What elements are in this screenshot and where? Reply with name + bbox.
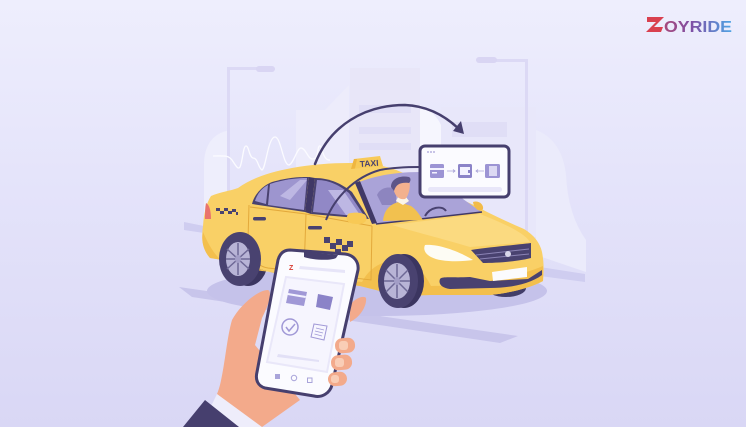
driver seat [377,187,396,205]
background city and street lamps [204,57,586,272]
rear tail light [205,203,211,219]
rear wheel rear tyre [228,234,268,286]
phone content panel [267,277,344,372]
driver [383,177,446,221]
icon: card [430,164,444,178]
rear wheel [219,232,261,286]
hand thumb side [350,297,366,322]
front bumper [439,270,542,289]
phone mini logo: Z [289,265,294,272]
tablet window dots [427,151,435,153]
icon: check circle [282,319,298,335]
tablet bottom bar [428,187,502,192]
arrowhead [453,121,464,134]
windshield base [376,212,482,224]
checker door [324,237,353,254]
hand back [217,290,300,427]
car far front wheel [486,279,526,297]
arrow: receipt to wallet [476,170,484,172]
grille [471,243,531,263]
phone notch [304,252,338,260]
arrow: card to wallet [447,170,455,172]
rear windows [252,177,309,212]
windshield [357,172,482,224]
side mirrors [347,213,367,224]
phone header bar [299,266,345,273]
taxi car [202,156,544,308]
arrow: car interior to tablet [326,167,420,220]
shirt cuff [201,394,262,427]
car body lower shade [202,232,543,296]
door handles [253,217,266,220]
phone nav icons [275,374,312,382]
fingers [327,337,356,387]
tablet [420,146,509,197]
door lines [248,205,372,280]
car body [202,163,544,296]
phone bottom bar [277,354,319,362]
icon: phone wallet [316,294,333,310]
icon: receipt [311,324,327,340]
a-pillar [355,181,377,224]
icon: wallet [458,164,472,178]
headlight [424,245,473,261]
front wheel [378,254,424,308]
phone [256,250,358,396]
arrow: car to tablet [315,105,461,164]
taxi roof sign: TAXI [359,158,379,169]
jacket sleeve [183,400,239,427]
checker rear [216,208,238,215]
road lines [179,222,585,343]
logo [646,17,732,36]
icon: receipt [485,164,500,178]
taxi roof sign [351,156,383,169]
license plate [492,267,527,281]
hood highlight [392,214,530,247]
icon: phone card [286,289,307,306]
heartbeat line [213,137,330,170]
logo: OYRIDE [664,19,732,36]
car shadow [207,266,547,316]
